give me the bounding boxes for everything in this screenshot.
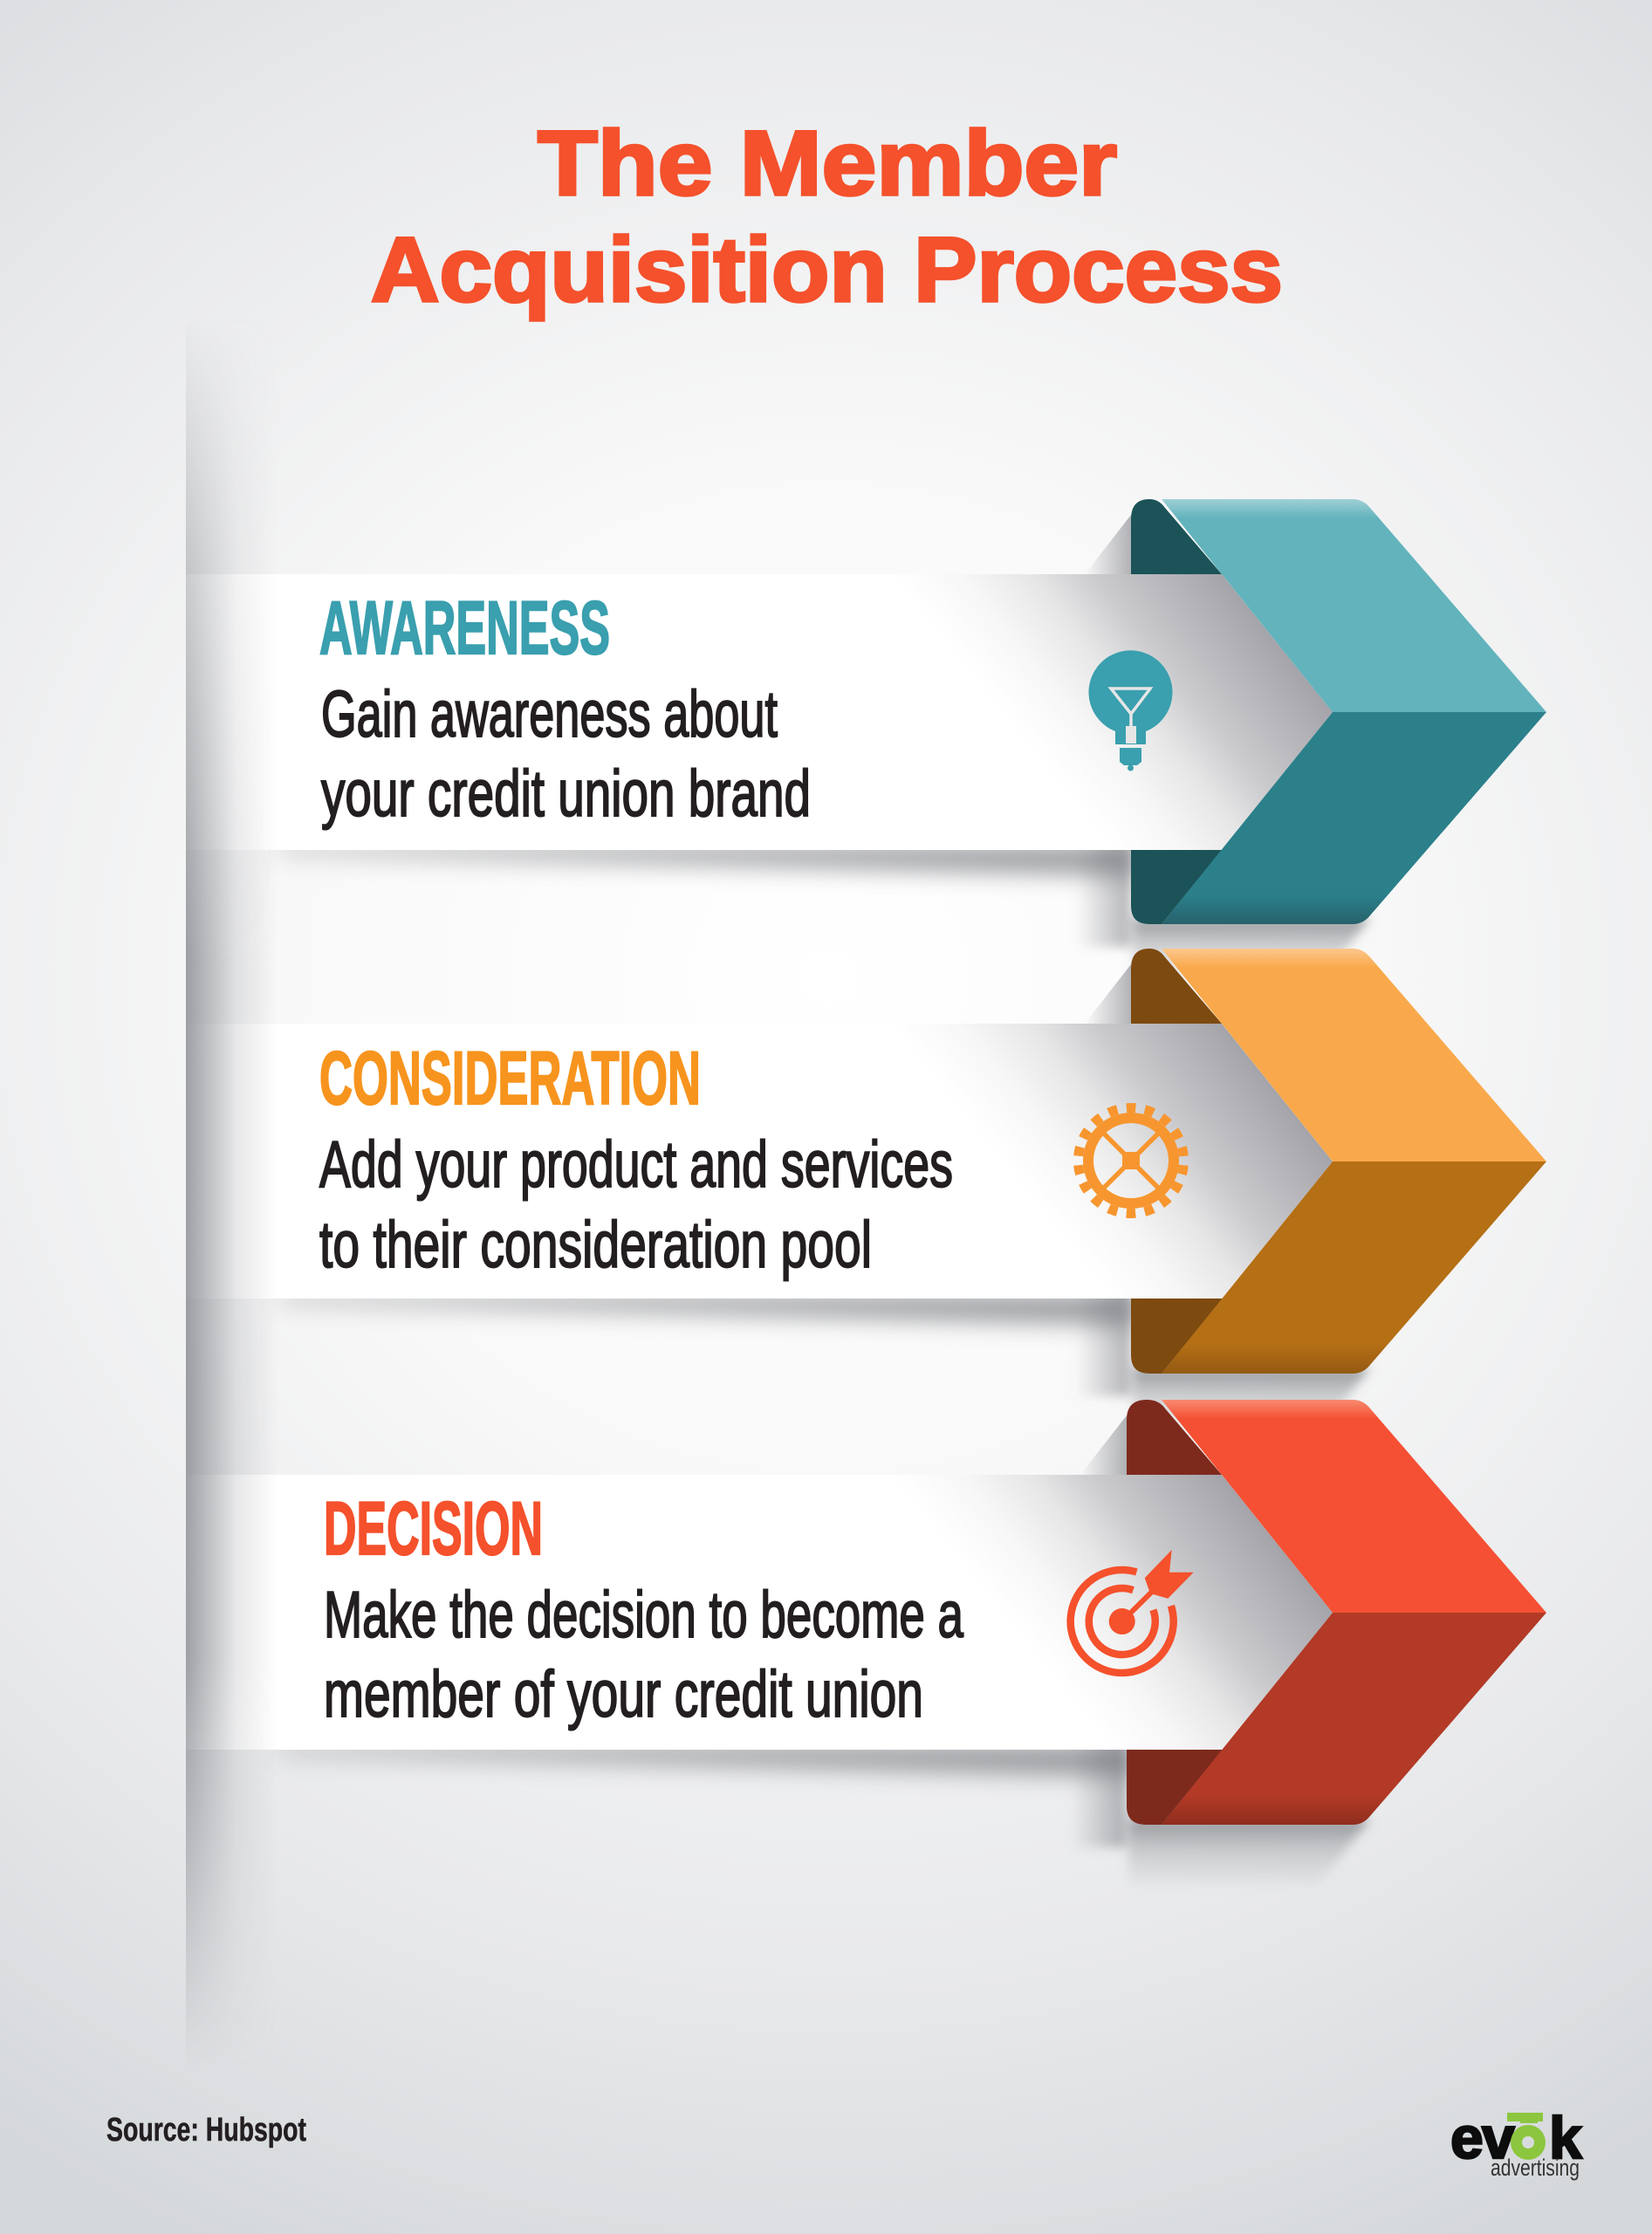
arrow top face [1162, 949, 1546, 1162]
arrow shadows [279, 1415, 1370, 1890]
text: consideration description: Add your product and services [319, 1127, 953, 1201]
logo: evok advertising: evōk [1450, 2105, 1582, 2171]
white band [186, 574, 1333, 850]
text: consideration description: to their consideration pool [319, 1208, 872, 1281]
source note: Source: Hubspot [106, 2112, 306, 2148]
white band [186, 1475, 1333, 1750]
icon: target with dart [1071, 1550, 1194, 1673]
arrow fold [1127, 1400, 1222, 1825]
title: The Member [538, 113, 1117, 215]
arrow top face [1162, 499, 1546, 712]
text: awareness description: Gain awareness about [321, 677, 778, 750]
icon: gear [1073, 1103, 1189, 1218]
panel: awareness step [186, 499, 1546, 990]
arrow shadows [279, 964, 1370, 1439]
heading: awareness: AWARENESS [319, 586, 610, 670]
white band [186, 1024, 1333, 1299]
title [371, 113, 1283, 321]
arrow top face [1162, 1400, 1546, 1613]
text: decision description: Make the decision to become a [324, 1578, 963, 1651]
heading: decision: DECISION [324, 1487, 543, 1571]
arrow bottom face [1162, 1613, 1546, 1825]
text: consideration description [319, 1127, 953, 1281]
panel: decision step [186, 1400, 1546, 1890]
arrow shadows [279, 515, 1370, 990]
text: decision description [324, 1578, 963, 1730]
text: awareness description: your credit union brand [321, 757, 811, 830]
text: decision description: member of your credit union [324, 1657, 923, 1730]
title: Acquisition Process [371, 219, 1283, 321]
icon: light bulb [1089, 650, 1173, 771]
left vertical shadow [186, 360, 264, 2030]
text: awareness description [321, 677, 811, 830]
logo: evok advertising: advertising [1491, 2155, 1580, 2181]
panel: consideration step [186, 949, 1546, 1439]
arrow fold [1131, 949, 1222, 1374]
arrow bottom face [1162, 712, 1546, 924]
arrow fold [1131, 499, 1222, 924]
heading: consideration: CONSIDERATION [319, 1037, 701, 1120]
arrow bottom face [1162, 1162, 1546, 1374]
